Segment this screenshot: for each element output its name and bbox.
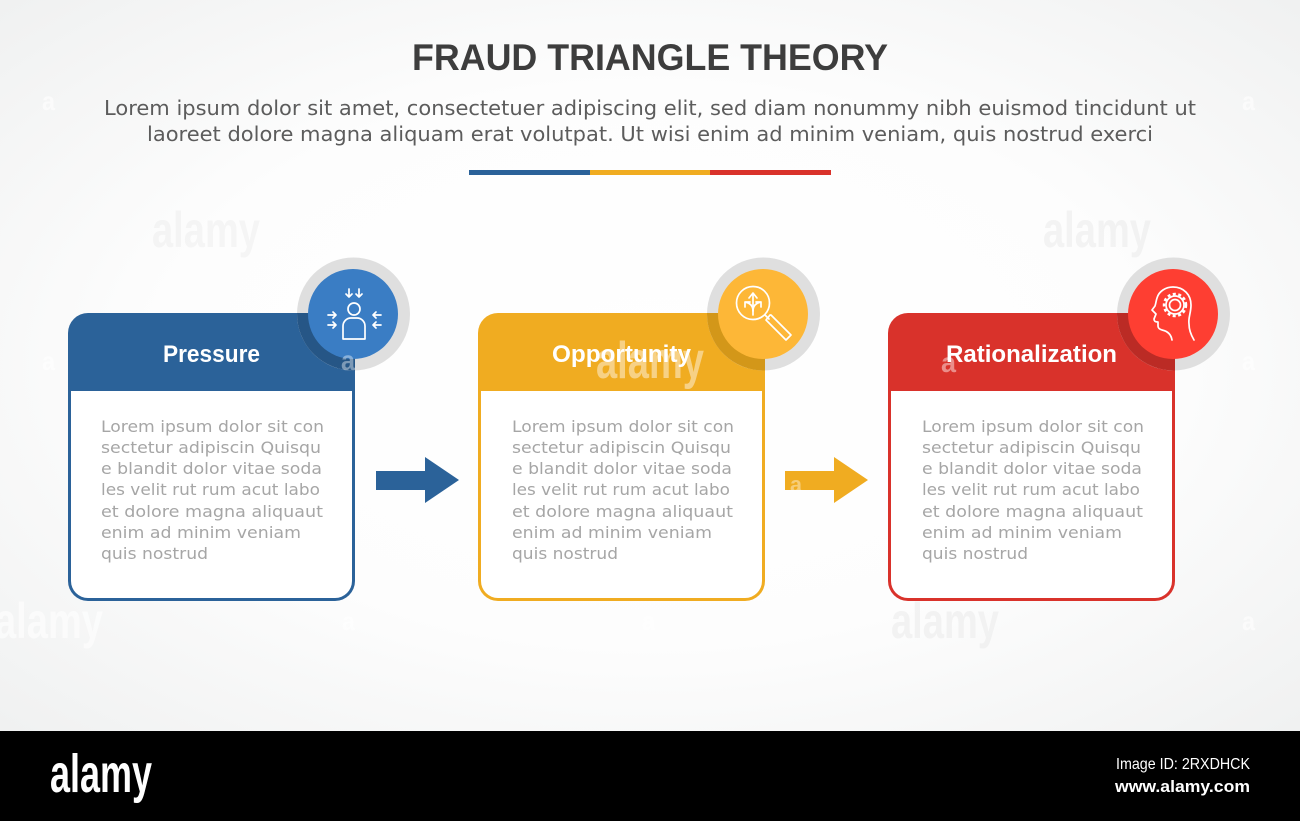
footer logo: alamy: [50, 744, 152, 804]
body text: opportunity: enim ad minim veniam: [512, 523, 712, 542]
body text: pressure: sectetur adipiscin Quisqu: [101, 438, 321, 457]
website: www.alamy.com: [1114, 777, 1250, 796]
watermarks: a: [1242, 346, 1255, 376]
heading: opportunity: Opportunity: [552, 341, 692, 368]
panel: opportunity: [478, 258, 820, 601]
body text: rationalization: enim ad minim veniam: [922, 523, 1122, 542]
footer bar: [0, 731, 1300, 821]
body text: pressure: [101, 417, 324, 563]
body text: opportunity: et dolore magna aliquaut: [512, 502, 733, 521]
watermarks: alamy: [1043, 202, 1151, 258]
text area: rationalization: [891, 391, 1172, 598]
icon circle: pressure: [308, 269, 398, 359]
body text: opportunity: e blandit dolor vitae soda: [512, 459, 732, 478]
title: FRAUD TRIANGLE THEORY: [412, 37, 888, 78]
watermarks: alamy: [891, 593, 999, 649]
image id: Image ID: 2RXDHCK: [1116, 756, 1250, 773]
subtitle text: Lorem ipsum dolor sit amet, consectetuer adipiscing elit, sed diam nonummy nibh euismod tincidunt ut: [104, 96, 1196, 120]
icon ring: rationalization: [1117, 258, 1230, 370]
panel: rationalization: [888, 258, 1230, 601]
body text: rationalization: Lorem ipsum dolor sit con: [922, 417, 1144, 436]
heading: pressure: Pressure: [163, 341, 260, 368]
arrow: opportunity to rationalization: [785, 457, 868, 503]
body text: pressure: quis nostrud: [101, 544, 208, 563]
text area: pressure: [71, 391, 352, 598]
body text: opportunity: les velit rut rum acut labo: [512, 480, 730, 499]
body text: rationalization: [922, 417, 1144, 563]
icon: magnifier with arrows: [736, 286, 791, 340]
icon ring: pressure: [297, 258, 410, 370]
panel: pressure: [68, 258, 410, 601]
tricolor divider: [469, 170, 831, 175]
watermarks: a: [42, 86, 55, 116]
text area: opportunity: [481, 391, 762, 598]
watermarks: alamy: [596, 332, 704, 390]
subtitle text: [104, 96, 1196, 146]
icon: head with gear: [1152, 287, 1194, 340]
watermarks: a: [1242, 86, 1255, 116]
watermarks: [0, 86, 1255, 649]
arrow: pressure to opportunity: [376, 457, 459, 503]
body text: rationalization: les velit rut rum acut labo: [922, 480, 1140, 499]
icon circle: rationalization: [1128, 269, 1218, 359]
watermarks: alamy: [152, 202, 260, 258]
watermarks: a: [342, 606, 355, 636]
watermarks: a: [1242, 606, 1255, 636]
body text: pressure: Lorem ipsum dolor sit con: [101, 417, 324, 436]
body text: pressure: e blandit dolor vitae soda: [101, 459, 322, 478]
card body: opportunity: [478, 313, 765, 601]
body text: pressure: enim ad minim veniam: [101, 523, 301, 542]
body text: rationalization: et dolore magna aliquaut: [922, 502, 1143, 521]
watermarks: a: [941, 347, 956, 378]
body text: rationalization: e blandit dolor vitae soda: [922, 459, 1142, 478]
body text: rationalization: quis nostrud: [922, 544, 1028, 563]
icon: person under pressure: [328, 289, 381, 339]
body text: pressure: les velit rut rum acut labo: [101, 480, 320, 499]
icon ring: opportunity: [707, 258, 820, 370]
subtitle text: laoreet dolore magna aliquam erat volutpat. Ut wisi enim ad minim veniam, quis nostrud exerci: [147, 122, 1153, 146]
watermarks: a: [642, 606, 655, 636]
body text: opportunity: [512, 417, 734, 563]
body text: opportunity: quis nostrud: [512, 544, 618, 563]
watermarks: a: [341, 345, 355, 376]
body text: opportunity: Lorem ipsum dolor sit con: [512, 417, 734, 436]
body text: opportunity: sectetur adipiscin Quisqu: [512, 438, 731, 457]
body text: rationalization: sectetur adipiscin Quisqu: [922, 438, 1141, 457]
watermarks: a: [790, 472, 803, 497]
watermarks: a: [42, 346, 55, 376]
card body: rationalization: [888, 313, 1175, 601]
heading: rationalization: Rationalization: [946, 341, 1117, 368]
card body: pressure: [68, 313, 355, 601]
body text: pressure: et dolore magna aliquaut: [101, 502, 323, 521]
icon circle: opportunity: [718, 269, 808, 359]
